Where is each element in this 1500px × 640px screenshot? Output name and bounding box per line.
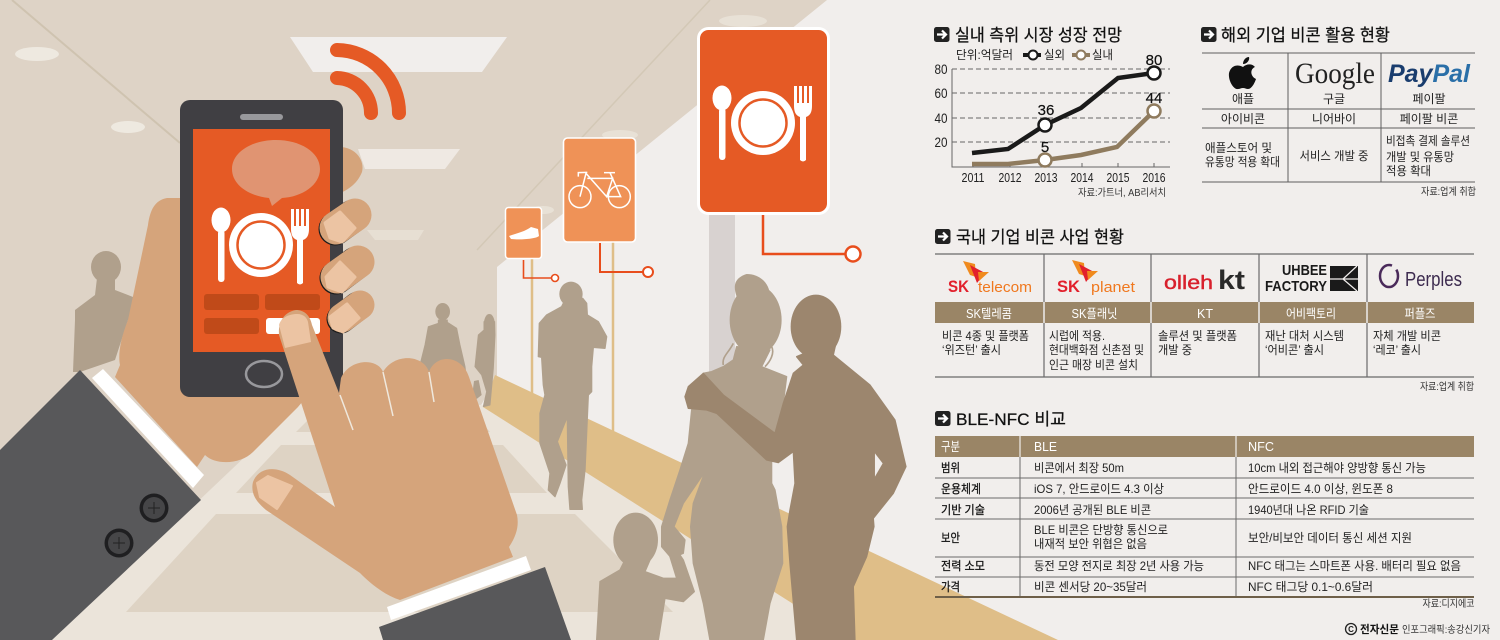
icon: bicycle: [569, 172, 630, 208]
background person middle: [420, 303, 468, 402]
line chart: 80: [1146, 52, 1162, 69]
small shoe sign: [506, 208, 558, 282]
row labels: 운용체계: [941, 482, 981, 496]
floor: [52, 395, 850, 640]
use descriptions: [1205, 134, 1470, 178]
logo: UHBEE Factory: FACTORY: [1265, 278, 1327, 295]
index fingernail: [279, 314, 311, 348]
finger behind phone: [335, 147, 363, 195]
use descriptions: 애플스토어 및: [1205, 141, 1272, 155]
panel: domestic company beacon business: [935, 228, 1474, 393]
credit line: 인포그래픽:송강신기자: [1402, 624, 1490, 636]
line chart: 2016: [1142, 170, 1166, 185]
business descriptions: 자체 개발 비콘: [1373, 329, 1441, 343]
NFC column: 1940년대 나온 RFID 기술: [1248, 503, 1369, 517]
heading arrow icon: [934, 27, 950, 42]
woman silhouette: [662, 274, 787, 640]
company names: 구글: [1323, 92, 1345, 106]
connector line small: [524, 260, 558, 282]
logo: PayPal: PayPal: [1388, 60, 1471, 88]
business descriptions: 솔루션 및 플랫폼: [1158, 329, 1237, 343]
NFC column: NFC 태그는 스마트폰 사용. 배터리 필요 없음: [1248, 559, 1461, 573]
heading arrow icon: [935, 229, 950, 244]
logo: SK planet: planet: [1091, 279, 1136, 296]
logo: UHBEE Factory: UHBEE: [1282, 262, 1327, 279]
row labels: 기반 기술: [941, 503, 985, 517]
heading: BLE-NFC 비교: [956, 410, 1066, 429]
medium bicycle sign: [564, 138, 653, 277]
business descriptions: 인근 매장 비콘 설치: [1049, 358, 1138, 372]
company names: 페이팔: [1412, 92, 1446, 106]
business descriptions: 시럽에 적용.: [1049, 329, 1105, 343]
business descriptions: ‘레코’ 출시: [1373, 343, 1421, 357]
use descriptions: 적용 확대: [1386, 164, 1431, 178]
line chart: 80: [934, 61, 948, 77]
company names: SK텔레콤: [966, 307, 1012, 321]
legend: 실내: [1092, 48, 1113, 62]
ceiling light panels: [12, 0, 767, 250]
logo: SK telecom: telecom: [978, 279, 1032, 296]
business descriptions: ‘어비콘’ 출시: [1265, 343, 1324, 357]
logo: Perples: Perples: [1405, 269, 1462, 291]
home button: [246, 361, 282, 387]
row labels: 보안: [941, 531, 960, 545]
use descriptions: 유통망 적용 확대: [1205, 155, 1280, 169]
business descriptions: 개발 중: [1158, 343, 1192, 357]
line chart: 5: [1041, 139, 1049, 156]
line chart: 2013: [1034, 170, 1058, 185]
company names: KT: [1197, 307, 1213, 321]
heading arrow icon: [935, 411, 950, 426]
line chart: 20: [934, 134, 948, 150]
child silhouette: [597, 513, 694, 640]
header labels: NFC: [1248, 440, 1274, 454]
walking man silhouette: [538, 282, 607, 509]
row labels: 범위: [941, 461, 960, 475]
phone speaker: [240, 114, 283, 120]
BLE column: 내재적 보안 위협은 없음: [1034, 537, 1147, 551]
source: 자료:업계 취합: [1420, 380, 1474, 393]
tan floor strip: [483, 375, 1058, 640]
pillar: [709, 215, 735, 375]
icon: plate, spoon and fork: [712, 86, 812, 162]
business descriptions: [942, 329, 1441, 372]
table grid: [935, 254, 1474, 377]
fingers gripping phone: [325, 212, 360, 332]
right sleeve with cuff: [379, 556, 571, 640]
credit line: C: [1348, 625, 1354, 634]
connector line large: [763, 215, 860, 262]
logo: Google: Google: [1295, 57, 1375, 90]
source: 자료:가트너, AB리서치: [1078, 187, 1166, 199]
source: 자료:업계 취합: [1421, 185, 1476, 198]
heading arrow icon: [1201, 27, 1216, 42]
holding hand: [115, 198, 320, 467]
legend: 실외: [1044, 48, 1065, 62]
icon: shoe: [509, 227, 539, 239]
name band: [935, 302, 1474, 323]
line chart: [934, 52, 1170, 185]
NFC column: [1248, 461, 1461, 594]
background person left: [73, 251, 133, 372]
business descriptions: 재난 대처 시스템: [1265, 329, 1344, 343]
logo: SK telecom: SK: [948, 277, 970, 296]
header labels: [941, 440, 1274, 454]
NFC column: 10cm 내외 접근해야 양방향 통신 가능: [1248, 461, 1426, 475]
logo: Perples: [1380, 265, 1462, 291]
table grid: [1202, 53, 1475, 182]
use descriptions: 비접촉 결제 솔루션: [1386, 134, 1470, 148]
business descriptions: ‘위즈턴’ 출시: [942, 343, 1001, 357]
line chart: 40: [934, 110, 948, 126]
business descriptions: 현대백화점 신촌점 및: [1049, 343, 1144, 357]
heading: 실내 측위 시장 성장 전망: [955, 26, 1122, 45]
company names: SK플래닛: [1072, 307, 1118, 321]
BLE column: iOS 7, 안드로이드 4.3 이상: [1034, 482, 1164, 496]
unit label: 단위:억달러: [956, 48, 1013, 62]
legend: [1023, 48, 1113, 62]
floor tiles: [126, 418, 673, 612]
use descriptions: 서비스 개발 중: [1300, 149, 1368, 163]
row labels: [941, 461, 985, 594]
BLE column: BLE 비콘은 단방향 통신으로: [1034, 523, 1168, 537]
company names: [1232, 92, 1446, 106]
sign poles: [532, 242, 613, 431]
panel: overseas company beacon use: [1201, 26, 1476, 198]
man silhouette: [685, 295, 906, 640]
panel: BLE-NFC comparison: [935, 410, 1474, 610]
header band: [935, 436, 1474, 457]
NFC column: 보안/비보안 데이터 통신 세션 지원: [1248, 531, 1412, 545]
logo: SK planet: [1057, 260, 1136, 296]
company names: [966, 307, 1436, 321]
background woman: [473, 314, 495, 407]
beacon names: 페이팔 비콘: [1400, 112, 1458, 126]
logo: olleh kt: kt: [1218, 265, 1245, 295]
business descriptions: 비콘 4종 및 플랫폼: [942, 329, 1029, 343]
beacon names: 니어바이: [1312, 112, 1356, 126]
company names: 애플: [1232, 92, 1254, 106]
credit line: [1346, 623, 1490, 636]
line chart: 2014: [1070, 170, 1094, 185]
header labels: 구분: [941, 440, 960, 454]
BLE column: 2006년 공개된 BLE 비콘: [1034, 503, 1151, 517]
credit line: 전자신문: [1360, 623, 1399, 636]
connector line medium: [600, 243, 653, 277]
beacon names: 아이비콘: [1221, 112, 1265, 126]
BLE column: 동전 모양 전지로 최장 2년 사용 가능: [1034, 559, 1204, 573]
heading: 국내 기업 비콘 사업 현황: [956, 228, 1124, 247]
pointing hand: [252, 310, 518, 600]
smartphone: [180, 100, 343, 397]
speech bubble: [232, 140, 320, 206]
logo: olleh kt: olleh: [1164, 273, 1213, 294]
wifi signal arcs: [337, 50, 399, 113]
header labels: BLE: [1034, 440, 1057, 454]
line chart: 2012: [998, 170, 1022, 185]
table grid: [935, 457, 1474, 597]
panel: indoor positioning market forecast: [934, 26, 1170, 199]
thumbnail: [257, 476, 292, 509]
heading: 해외 기업 비콘 활용 현황: [1221, 26, 1390, 45]
BLE column: 비콘에서 최장 50m: [1034, 461, 1124, 475]
company names: 퍼플즈: [1404, 307, 1436, 321]
company names: 어비팩토리: [1286, 307, 1336, 321]
line chart: 2015: [1106, 170, 1130, 185]
ceiling and left wall: [0, 0, 827, 640]
logo: SK telecom: [948, 261, 1032, 296]
beacon names: [1221, 112, 1458, 126]
source: 자료:디지에코: [1422, 598, 1474, 610]
BLE column: [1034, 461, 1204, 594]
line chart: 44: [1146, 90, 1162, 107]
NFC column: NFC 태그당 0.1~0.6달러: [1248, 580, 1373, 594]
row labels: 전력 소모: [941, 559, 985, 573]
phone screen: [193, 129, 330, 352]
icon: plate, spoon and fork on screen: [212, 208, 309, 284]
line chart: 36: [1038, 102, 1054, 119]
BLE column: 비콘 센서당 20~35달러: [1034, 580, 1147, 594]
logo: olleh kt: [1164, 265, 1245, 295]
line chart: 2011: [962, 170, 984, 185]
screen buttons: [204, 294, 320, 334]
NFC column: 안드로이드 4.0 이상, 윈도폰 8: [1248, 482, 1393, 496]
logo: UHBEE Factory: [1265, 262, 1358, 295]
row labels: 가격: [941, 580, 960, 594]
large restaurant sign: [698, 28, 860, 262]
line chart: 60: [934, 85, 948, 101]
logo: Apple: [1229, 57, 1256, 89]
use descriptions: 개발 및 유통망: [1386, 150, 1454, 164]
left sleeve with cuff and buttons: [0, 369, 204, 640]
logo: SK planet: SK: [1057, 277, 1081, 296]
